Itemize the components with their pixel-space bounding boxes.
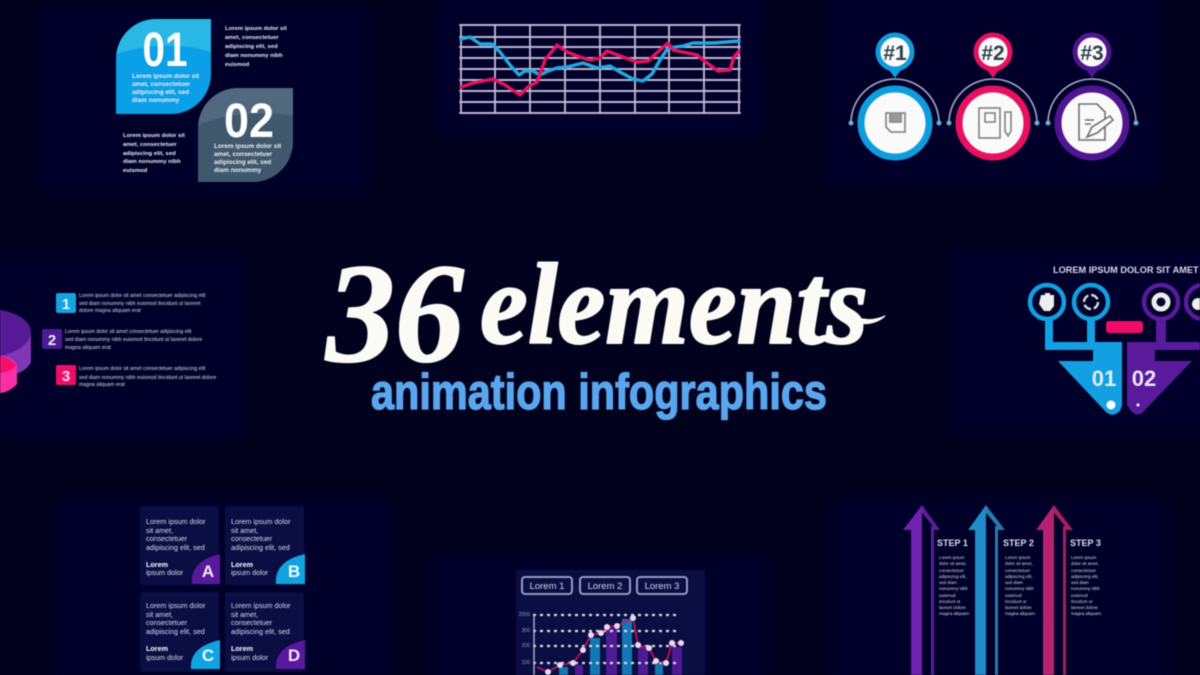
legend labels: Lorem 1: [530, 581, 564, 592]
panel: isometric list: [0, 293, 216, 393]
step 2 text: laoreet dolore: [1005, 605, 1032, 610]
card C: Lorem ipsum dolor: [146, 601, 206, 610]
leaf 02: [195, 85, 296, 182]
item 2: 2: [48, 332, 56, 349]
text block: lower left: Lorem ipsum dolor sit: [123, 133, 185, 139]
arrow 01: [1030, 285, 1122, 415]
item 2: [42, 329, 202, 351]
pink line with markers: [537, 615, 684, 675]
card A: Lorem: [146, 560, 168, 569]
step 3 text: dolor sit amet,: [1071, 561, 1099, 566]
card D: consectetuer: [231, 618, 273, 627]
item 2: sed diam nonummy nibh euismod tincidunt ut laoreet dolore: [65, 337, 202, 343]
card D: Lorem ipsum dolor: [231, 601, 291, 610]
icon: notebook and pencil: [979, 108, 1011, 138]
card D: ipsum dolor: [231, 653, 269, 662]
card C: sit amet,: [146, 610, 173, 619]
step 1 text: consectetuer: [939, 568, 965, 573]
card C: Lorem: [146, 644, 168, 653]
item 1: dolore magna aliquam erat: [79, 308, 141, 314]
text block: lower left: adipiscing elit, sed: [123, 151, 176, 157]
icon: refresh: [1084, 295, 1098, 309]
step 2 text: dolor sit amet,: [1005, 561, 1033, 566]
card C: ipsum dolor: [146, 653, 184, 662]
legend buttons: [522, 577, 687, 594]
card A: adipiscing elit, sed: [146, 543, 205, 552]
item 1: sed diam nonummy nibh euismod tincidunt ut laoreet: [79, 301, 201, 307]
item 3: magna aliquam erat: [79, 382, 125, 388]
step 3 text: consectetuer: [1071, 568, 1097, 573]
step 1 text: STEP 1: [937, 538, 968, 548]
axis labels: 100: [522, 660, 530, 666]
card C: adipiscing elit, sed: [146, 627, 205, 636]
card A: consectetuer: [146, 534, 188, 543]
card B: [225, 506, 305, 585]
step 3 text: sed diam: [1071, 580, 1089, 585]
heading: LOREM IPSUM DOLOR SIT AMET: [1053, 265, 1199, 275]
blue series: [461, 37, 739, 81]
isometric cylinder: [0, 310, 31, 393]
bars: [559, 619, 682, 675]
panel: step arrows: [903, 505, 1101, 675]
step 1 text: sed diam: [939, 580, 957, 585]
card B: Lorem ipsum dolor: [231, 517, 291, 526]
axis labels: 2000: [519, 612, 530, 618]
step 2 text: Lorem ipsum: [1005, 555, 1031, 560]
text block: lower left: euismod: [123, 168, 148, 174]
card B: sit amet,: [231, 526, 258, 535]
grid: [533, 615, 680, 663]
item 3: [56, 365, 216, 388]
card B: B: [288, 562, 300, 581]
card C: consectetuer: [146, 618, 188, 627]
panel: combo chart: [516, 570, 705, 675]
arrow step 3: [1036, 505, 1073, 675]
step 3 text: laoreet dolore: [1071, 605, 1098, 610]
title: [324, 234, 885, 392]
item 3: 3: [62, 368, 70, 385]
item 2: #2: [981, 42, 1005, 65]
arrow step 2: [968, 505, 1005, 675]
card D: adipiscing elit, sed: [231, 627, 290, 636]
card D: Lorem: [231, 644, 253, 653]
step 2 text: magna aliquam: [1005, 611, 1035, 616]
leaf 01: diam nonummy: [132, 97, 180, 104]
leaf 01: [110, 15, 215, 114]
axis labels: 300: [522, 628, 530, 634]
step 3 text: [1070, 538, 1101, 616]
step 3 text: STEP 3: [1070, 538, 1101, 548]
icon: hand: [1039, 293, 1054, 311]
step 1 text: [937, 538, 969, 616]
item 1: 1: [62, 296, 70, 313]
step 2 text: [1003, 538, 1035, 616]
title: 36: [324, 234, 464, 392]
card B: Lorem: [231, 560, 253, 569]
card D: [225, 592, 305, 672]
panel: ranked circles: [848, 35, 1138, 157]
panel: ABCD cards: [140, 506, 305, 672]
text block: lower left: diam nonummy nibh: [123, 159, 181, 165]
step 2 text: STEP 2: [1003, 538, 1034, 548]
legend labels: Lorem 3: [645, 581, 679, 592]
step 2 text: consectetuer: [1005, 568, 1031, 573]
legend labels: Lorem 2: [588, 581, 622, 592]
leaf 02: diam nonummy: [214, 167, 262, 174]
leaf 02: 02: [224, 95, 274, 148]
step 2 text: tincidunt ut: [1005, 599, 1027, 604]
item 3: sed diam nonummy nibh euismod tincidunt ut laoreet dolore: [79, 375, 216, 381]
step 1 text: tincidunt ut: [939, 599, 961, 604]
card B: adipiscing elit, sed: [231, 543, 290, 552]
card C: [140, 592, 220, 672]
card D: D: [288, 646, 300, 665]
step 1 text: euismod: [939, 593, 956, 598]
card A: A: [202, 562, 214, 581]
step 3 text: tincidunt ut: [1071, 599, 1093, 604]
leaf 02: amet, consectetuer: [214, 151, 273, 158]
line chart: [460, 25, 740, 113]
item 2: [946, 35, 1040, 157]
text block: lower left: amet, consectetuer: [123, 142, 177, 148]
step 2 text: nonummy nibh: [1005, 586, 1034, 591]
step 3 text: euismod: [1071, 593, 1088, 598]
text block: upper right: euismod: [225, 62, 250, 68]
legend labels: [530, 581, 679, 592]
step 2 text: euismod: [1005, 593, 1022, 598]
leaf 01: adipiscing elit, sed: [132, 89, 189, 96]
text block: upper right: Lorem ipsum dolor sit: [225, 26, 287, 32]
icon: document and pen: [1079, 104, 1113, 140]
panel: branching arrows: [1030, 265, 1200, 415]
item 1: Lorem ipsum dolor sit amet consectetuer adipiscing elit: [79, 293, 206, 299]
text block: upper right: amet, consectetuer: [225, 35, 279, 41]
card D: sit amet,: [231, 610, 258, 619]
card A: sit amet,: [146, 526, 173, 535]
arrow 01: 01: [1092, 366, 1116, 391]
item 2: Lorem ipsum dolor sit amet consectetuer adipiscing elit: [65, 329, 192, 335]
axis labels: [519, 612, 530, 666]
icon: gear: [1154, 295, 1168, 309]
arrow 02: [1127, 285, 1200, 414]
step 3 text: nonummy nibh: [1071, 586, 1100, 591]
step 1 text: nonummy nibh: [939, 586, 968, 591]
card B: consectetuer: [231, 534, 273, 543]
step 1 text: Lorem ipsum: [939, 555, 965, 560]
card A: [140, 506, 220, 585]
item 3: [1046, 35, 1138, 157]
leaf 01: Lorem ipsum dolor sit: [132, 73, 200, 80]
item 3: Lorem ipsum dolor sit amet consectetuer adipiscing elit: [79, 366, 206, 372]
card C: C: [202, 646, 214, 665]
step 2 text: sed diam: [1005, 580, 1023, 585]
step 1 text: laoreet dolore: [939, 605, 966, 610]
subtitle: animation infographics: [371, 364, 827, 420]
step 1 text: magna aliquam: [939, 611, 969, 616]
card A: Lorem ipsum dolor: [146, 517, 206, 526]
text block: upper right: adipiscing elit, sed: [225, 44, 278, 50]
leaf 02: Lorem ipsum dolor sit: [214, 143, 282, 150]
panel: numbered leaves: [110, 15, 296, 182]
step 1 text: dolor sit amet,: [939, 561, 967, 566]
step 1 text: adipiscing elit,: [939, 574, 967, 579]
icon: document stack: [886, 113, 905, 132]
arrow step 1: [903, 505, 940, 675]
item 1: [56, 293, 206, 314]
divider pill: [1106, 321, 1143, 333]
card B: ipsum dolor: [231, 568, 269, 577]
item 1: [848, 35, 942, 157]
pink series: [461, 43, 739, 95]
item 3: #3: [1080, 42, 1104, 65]
step 3 text: Lorem ipsum: [1071, 555, 1097, 560]
step 3 text: adipiscing elit,: [1071, 574, 1099, 579]
card A: ipsum dolor: [146, 568, 184, 577]
leaf 01: amet, consectetuer: [132, 81, 191, 88]
axis labels: 200: [522, 643, 530, 649]
item 1: #1: [883, 42, 907, 65]
step 3 text: magna aliquam: [1071, 611, 1101, 616]
title: elements: [480, 241, 868, 368]
arrow 02: 02: [1132, 366, 1156, 391]
text block: upper right: diam nonummy nibh: [225, 53, 283, 59]
leaf 02: adipiscing elit, sed: [214, 159, 271, 166]
step 2 text: adipiscing elit,: [1005, 574, 1033, 579]
item 2: magna aliquam erat: [65, 345, 111, 351]
leaf 01: 01: [142, 24, 188, 77]
